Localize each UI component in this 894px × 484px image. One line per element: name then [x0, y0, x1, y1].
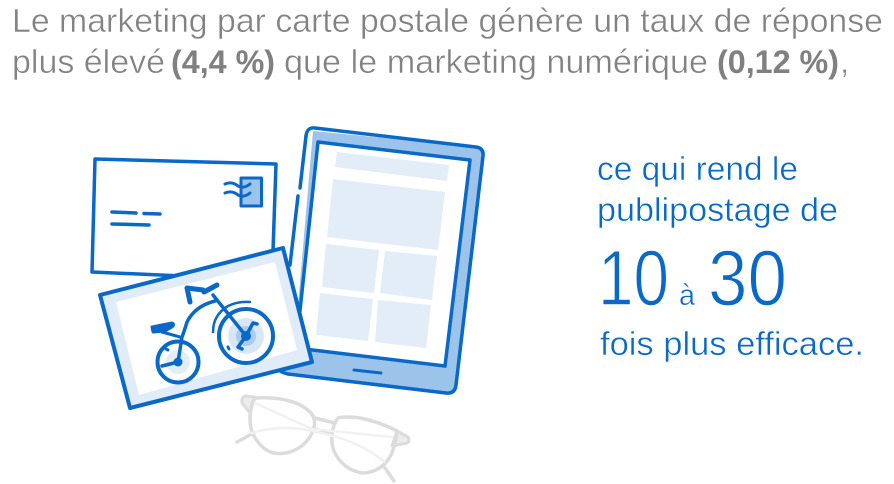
tablet screen: [296, 142, 470, 366]
heading: response rates: (0,12 %): [717, 44, 839, 80]
icon: postcard with bicycle: [100, 248, 312, 408]
big number: [598, 233, 787, 322]
big number: 10: [598, 233, 669, 322]
callout: 10 to 30 times more effective: fois plus efficace.: [600, 325, 864, 362]
heading: response rates: que le marketing numérique: [284, 43, 708, 80]
heading: response rates: [12, 2, 883, 80]
address lines: [112, 212, 160, 225]
heading: response rates: plus élevé: [12, 43, 165, 80]
icon: envelope: [92, 159, 276, 280]
big number: à: [679, 279, 695, 312]
heading: response rates: (4,4 %): [171, 44, 275, 80]
heading: response rates: ,: [840, 43, 849, 80]
icon: tablet: [278, 128, 483, 393]
icon: stamp: [225, 178, 262, 206]
bicycle: [152, 285, 273, 382]
heading: response rates: Le marketing par carte postale génère un taux de réponse: [12, 2, 883, 39]
callout: 10 to 30 times more effective: [597, 150, 864, 362]
big number: 30: [708, 233, 787, 322]
callout: 10 to 30 times more effective: publipostage de: [597, 191, 838, 228]
icon: glasses: [237, 396, 409, 481]
screen content blocks: [316, 152, 449, 348]
home button: [354, 370, 381, 373]
callout: 10 to 30 times more effective: ce qui rend le: [597, 150, 798, 187]
